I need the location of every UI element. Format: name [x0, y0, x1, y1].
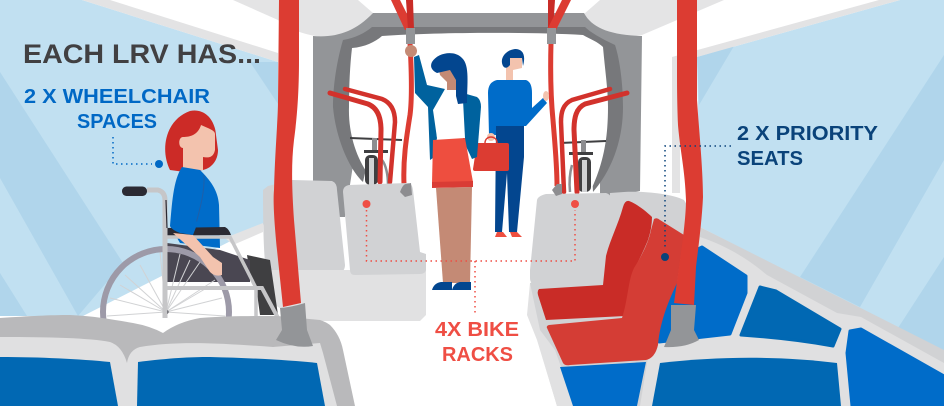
callout: priority seats: [661, 123, 879, 261]
panel: door frame: [313, 13, 642, 300]
person: woman in wheelchair: [165, 111, 278, 315]
icon: right bike: [560, 140, 606, 192]
panel: left rear seats: [263, 180, 426, 321]
panel: right window: [672, 0, 944, 352]
title: EACH LRV HAS...: [23, 39, 261, 69]
left grab pole: [274, 0, 313, 347]
callout: bike racks: [362, 200, 579, 366]
callout: bike racks: 4X BIKE: [435, 319, 519, 341]
panel: red priority seats: [538, 201, 684, 365]
icon: left bike: [350, 138, 402, 185]
centre poles: [391, 0, 571, 186]
panel: front left seats: [0, 315, 355, 406]
person: man with bag: [473, 49, 549, 237]
panel: right seats frame: [527, 184, 944, 406]
callout: wheelchair spaces: [24, 86, 211, 168]
bike rack rails: [330, 89, 627, 192]
icon: wheelchair: [103, 186, 278, 375]
callout: wheelchair spaces: SPACES: [77, 111, 157, 133]
callout: bike racks: RACKS: [442, 344, 513, 366]
callout: priority seats: SEATS: [737, 148, 803, 170]
right grab pole: [664, 0, 703, 347]
callout: priority seats: 2 X PRIORITY: [737, 123, 879, 145]
person: woman standing: [405, 45, 481, 290]
panel: left window: [0, 0, 278, 316]
panel: ceiling: [233, 0, 724, 37]
callout: wheelchair spaces: 2 X WHEELCHAIR: [24, 86, 211, 108]
panel: blue seats right: [560, 247, 944, 406]
